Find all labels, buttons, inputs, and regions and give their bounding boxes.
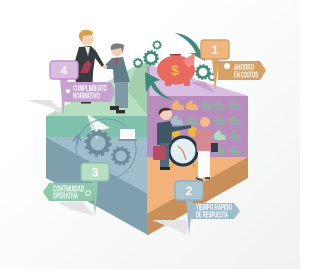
callout 3 bbox=[43, 163, 109, 216]
icon: piggy bank bbox=[157, 53, 195, 86]
thumbs grid bbox=[171, 100, 241, 155]
label bbox=[218, 61, 266, 80]
callout 4: NORMATIVO bbox=[73, 92, 100, 100]
callout 3: CONTINUIDAD bbox=[53, 184, 84, 194]
callout 1 bbox=[201, 40, 266, 92]
pin bbox=[212, 58, 219, 92]
label bbox=[188, 203, 240, 219]
number box bbox=[50, 61, 78, 79]
person: woman bbox=[195, 117, 218, 181]
number box bbox=[201, 40, 229, 59]
arrow: top bbox=[175, 33, 205, 61]
divider strip bbox=[147, 66, 149, 157]
callout 4: CUMPLIMIENTO bbox=[73, 84, 107, 93]
shadow under callout 1 bbox=[190, 82, 215, 93]
panel: green top bbox=[46, 62, 148, 116]
label bbox=[63, 82, 115, 102]
callout 3: OPERATIVA bbox=[53, 192, 78, 200]
person: man in grey suit bbox=[105, 43, 130, 113]
icon: paper plane bbox=[87, 114, 110, 140]
callout 2: TIEMPO RÁPIDO bbox=[196, 203, 232, 212]
shadows bbox=[26, 100, 188, 235]
callout 4 bbox=[50, 61, 115, 115]
arrow: lower bbox=[145, 72, 173, 100]
icon: piggy bank: $ bbox=[171, 62, 179, 78]
icon: laptop bbox=[118, 129, 137, 141]
person: man with briefcase bbox=[153, 108, 191, 170]
panel: purple face bbox=[148, 96, 248, 157]
number box bbox=[81, 163, 109, 181]
callout 2 bbox=[175, 181, 240, 235]
person: hands bbox=[103, 65, 107, 69]
icons: process gears bbox=[73, 119, 136, 179]
panel: orange top bbox=[148, 157, 248, 213]
pin bbox=[92, 180, 98, 216]
icon: alarm clock bbox=[168, 127, 198, 168]
panel: green band bbox=[46, 116, 148, 137]
callout 2: 2 bbox=[186, 184, 193, 198]
person: man in black suit bbox=[73, 30, 104, 103]
callout 4: 4 bbox=[61, 64, 68, 78]
label bbox=[43, 183, 93, 201]
cube bbox=[46, 62, 248, 235]
callout 1: 1 bbox=[212, 43, 219, 57]
callout 2: DE RESPUESTA bbox=[196, 210, 228, 220]
number box bbox=[175, 181, 203, 200]
panel: orange side bbox=[148, 157, 248, 235]
callout 1: AHORRO bbox=[234, 63, 254, 72]
panel: blue face bbox=[46, 137, 148, 235]
callout 3: 3 bbox=[92, 166, 99, 180]
pin bbox=[186, 199, 193, 235]
pin bbox=[60, 78, 68, 115]
panel: purple top bbox=[148, 64, 248, 97]
icons: green gears bbox=[133, 41, 216, 81]
callout 1: EN COSTOS bbox=[234, 70, 258, 80]
